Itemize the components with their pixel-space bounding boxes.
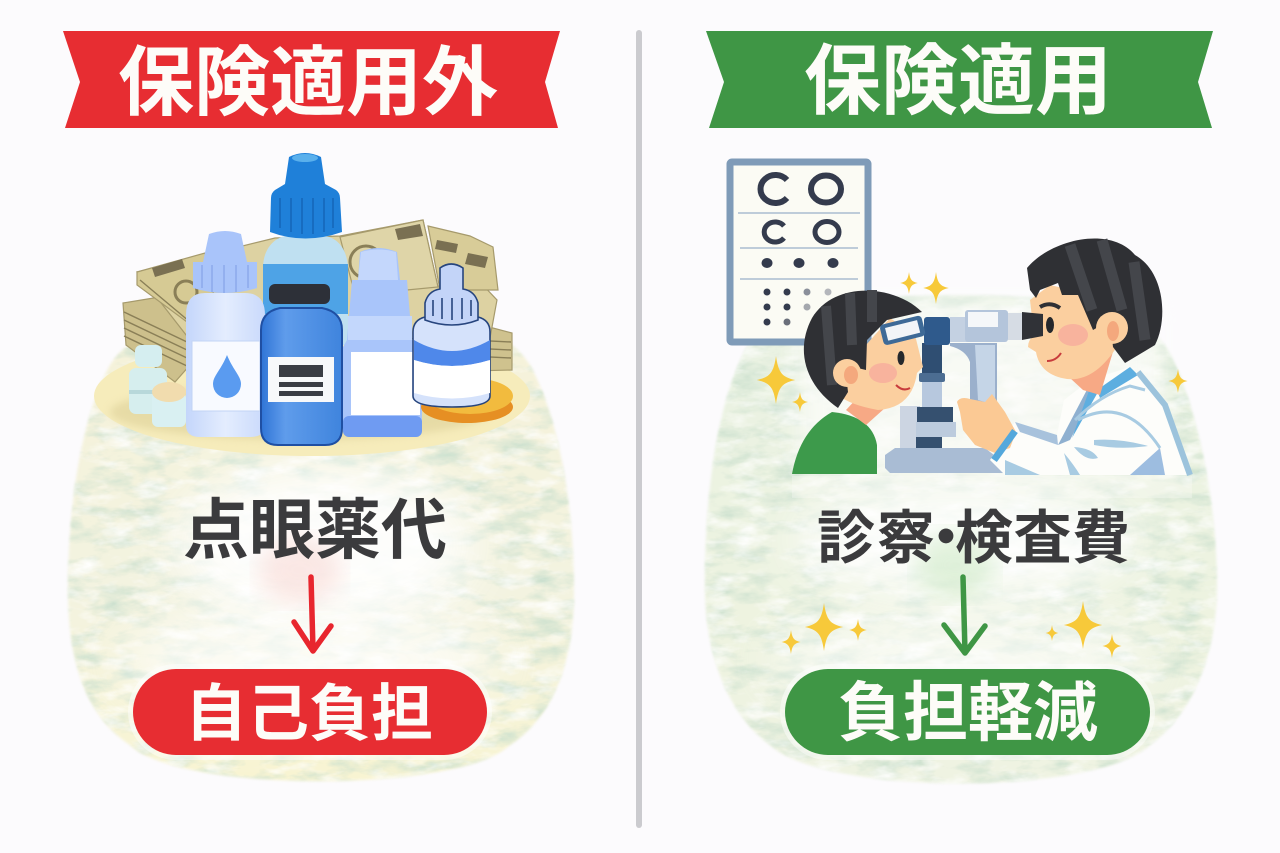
pill: 負担軽減: 負担軽減 — [838, 676, 1098, 749]
label: 診察・検査費: 診察 — [817, 506, 937, 571]
center divider — [636, 30, 642, 828]
far right bottle — [413, 264, 490, 407]
dark blue bottle — [261, 284, 342, 445]
right bottle with label — [343, 248, 422, 437]
eye chart — [730, 162, 868, 342]
banner: 保険適用外 — [63, 31, 560, 128]
arrow: down red — [294, 577, 331, 651]
doctor — [957, 239, 1190, 475]
small jar — [152, 382, 186, 427]
left bottle with drop — [186, 231, 265, 437]
pill: 負担軽減 — [780, 664, 1155, 760]
label: 診察・検査費: 検査費 — [955, 506, 1131, 571]
banner: 保険適用 — [706, 31, 1213, 128]
illustration: eye drops and money — [94, 153, 530, 456]
panel: right background blob — [705, 295, 1217, 783]
banknote stacks — [123, 220, 512, 382]
tray shadow — [94, 336, 530, 456]
panel: left background blob — [68, 300, 574, 781]
boy — [792, 290, 926, 474]
sparkles: lower right — [1046, 601, 1122, 658]
small vial — [129, 345, 167, 414]
banner: 保険適用外: 保険適用外 — [118, 41, 498, 126]
label: 診察・検査費: ・ — [917, 506, 975, 571]
sparkles: top — [900, 272, 949, 304]
pill: 自己負担 — [128, 664, 492, 760]
illustration: eye exam — [730, 162, 1190, 475]
sparkles: lower left — [781, 603, 867, 654]
slit lamp machine — [885, 310, 1022, 473]
banner: 保険適用: 保険適用 — [804, 39, 1112, 125]
coin — [421, 378, 513, 423]
pill: 自己負担: 自己負担 — [185, 680, 433, 749]
arrow: down green — [944, 577, 985, 653]
label: 点眼薬代: 点眼薬代 — [183, 493, 447, 567]
sparkles: left — [757, 356, 808, 412]
large blue-cap bottle — [263, 153, 348, 345]
sparkle: right — [1168, 369, 1188, 393]
